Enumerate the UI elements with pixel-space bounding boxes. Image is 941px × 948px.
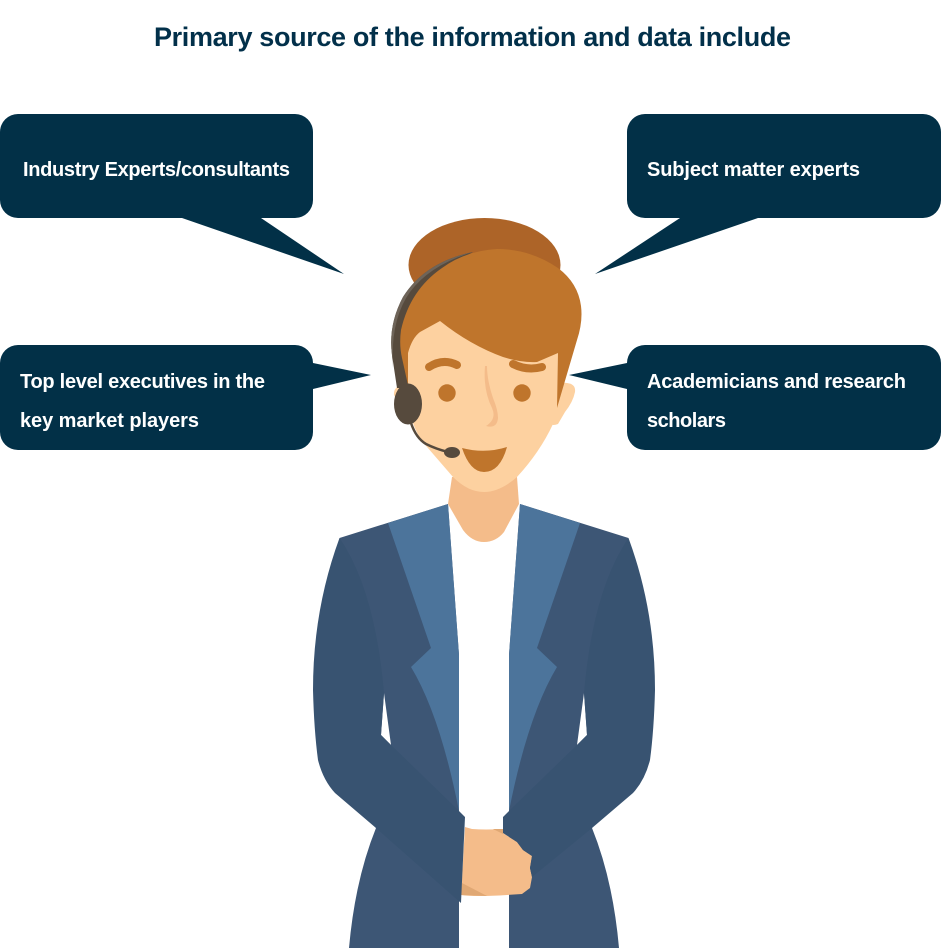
eyebrows [429,362,542,368]
left sleeve [313,538,465,903]
nose [485,366,498,427]
lapel right [509,504,580,811]
neck [448,477,519,542]
hand shadow [461,829,503,896]
callout: top level executives: key market players [20,410,199,432]
mouth [462,447,507,472]
hair bun [408,218,560,312]
ears [394,382,575,425]
callout: subject matter experts [595,114,941,274]
hand [461,827,532,896]
hair [400,249,582,408]
character illustration [313,218,655,948]
face [408,310,562,492]
callout: industry experts [0,114,344,274]
jacket body right [509,504,628,948]
waist gaps [381,693,587,745]
title: Primary source of the information and data include [154,22,791,52]
eyes [438,384,531,402]
callout: subject matter experts: Subject matter experts [647,159,860,181]
callout: top level executives: Top level executives in the [20,371,265,393]
headset microphone [411,423,448,452]
right sleeve [503,538,655,877]
jacket body left [340,504,459,948]
headset band [391,252,473,388]
callout: industry experts: Industry Experts/consultants [23,159,290,181]
lapel left [388,504,459,811]
callout: academicians: Academicians and research [647,371,906,393]
callout: top level executives [0,345,371,450]
callout: academicians: scholars [647,410,726,432]
callout: academicians [569,345,941,450]
headset earcup [394,384,422,424]
